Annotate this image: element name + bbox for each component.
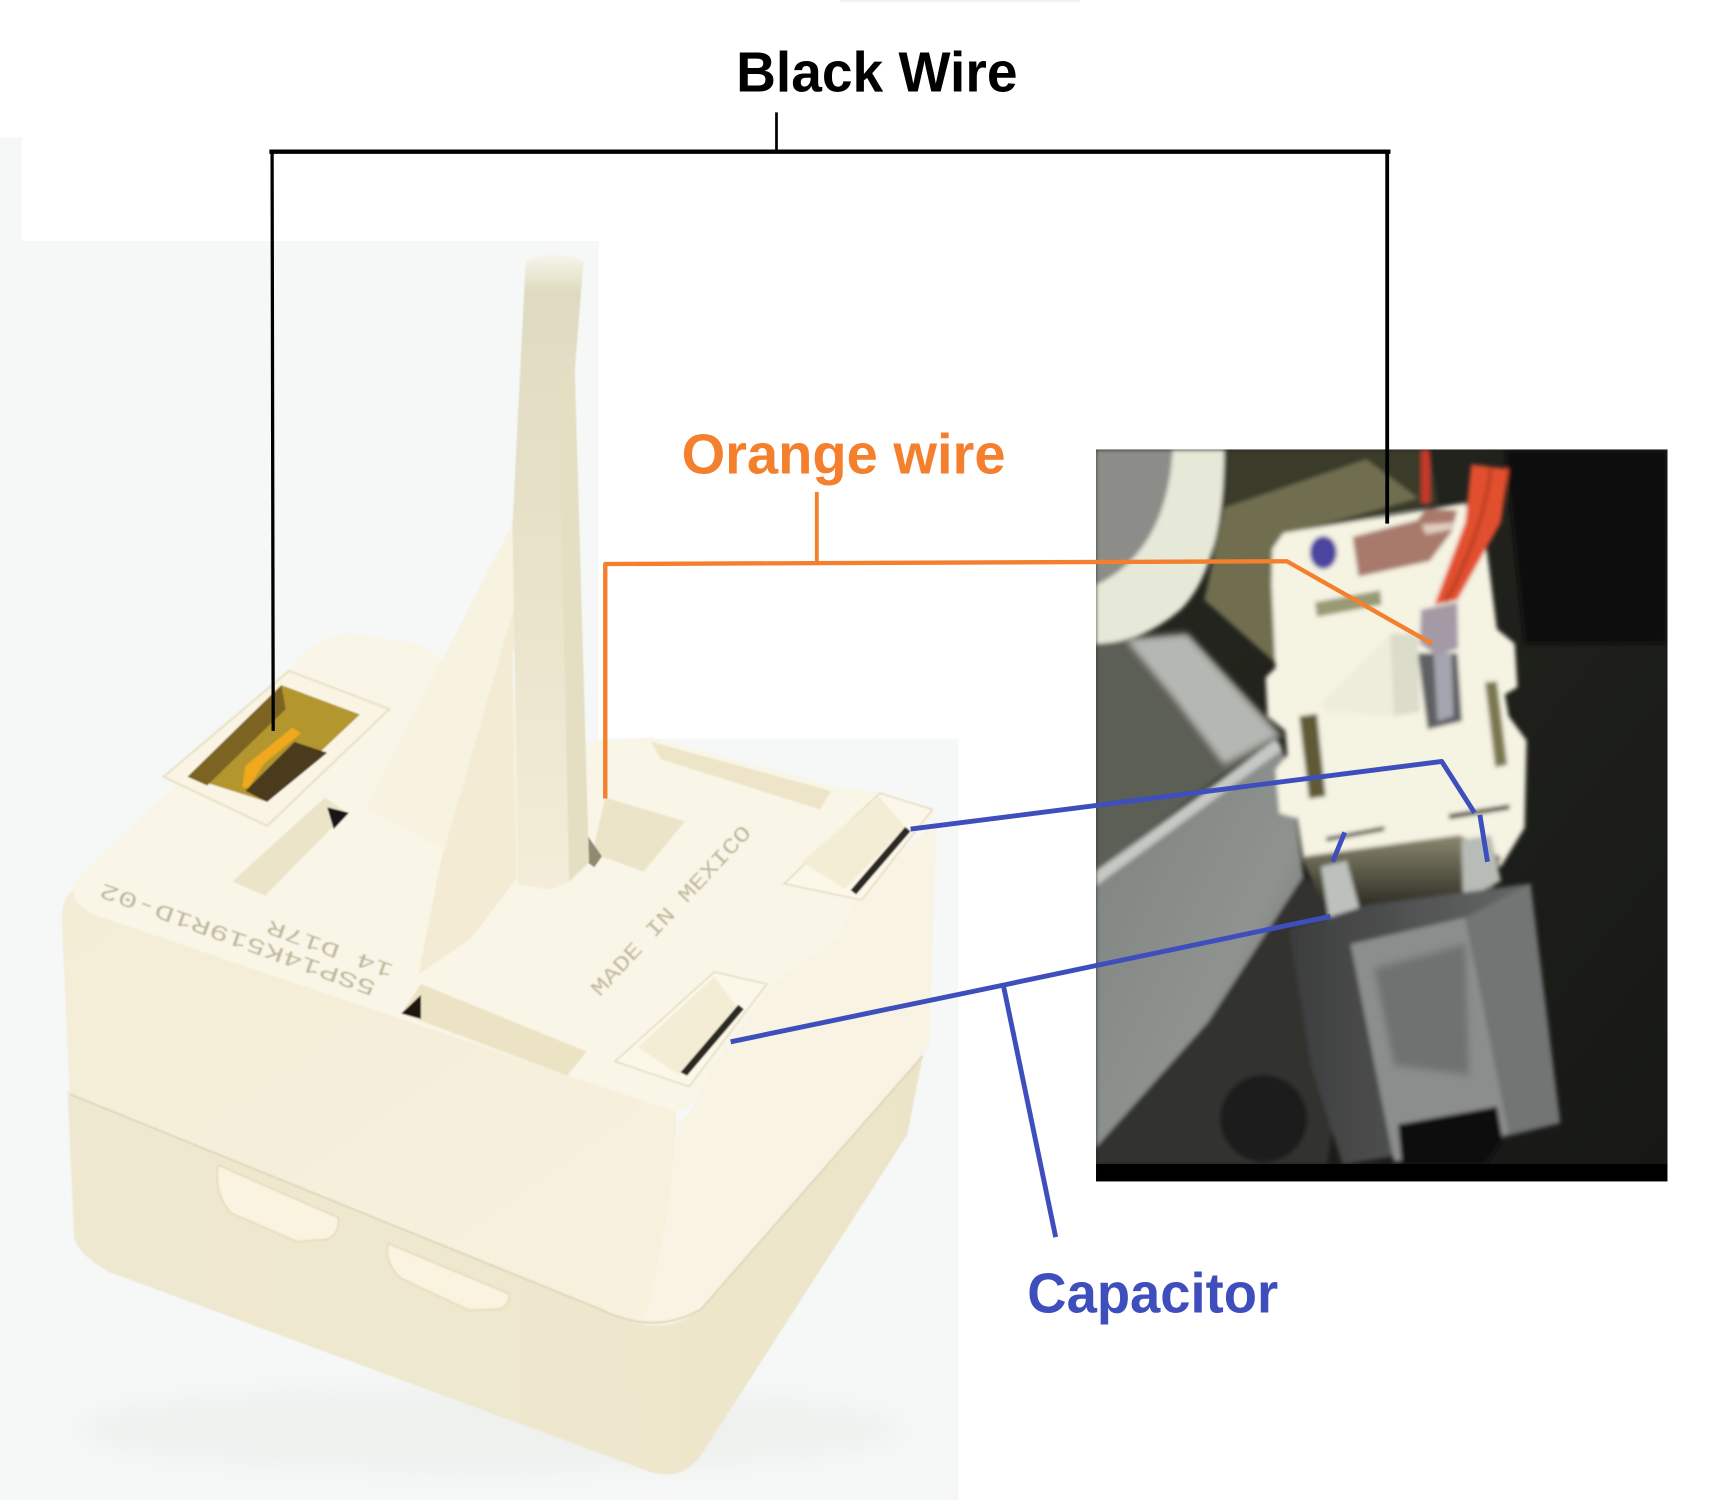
relay: product photo illustration	[62, 254, 937, 1474]
label: Capacitor: Capacitor	[1027, 1262, 1278, 1325]
relay upper left face	[62, 887, 676, 1324]
capacitor connector	[1398, 1107, 1503, 1165]
front fin	[419, 549, 531, 974]
pink connector	[1353, 508, 1457, 577]
spike	[513, 254, 589, 889]
grey spade terminal	[1418, 653, 1462, 729]
capacitor terminal bottom	[615, 972, 767, 1087]
fin	[1323, 634, 1420, 716]
moulded text: origin: MADE IN MEXICO	[587, 821, 757, 1002]
black wire lines	[269, 112, 1390, 731]
purple dot	[1310, 536, 1337, 569]
red wires	[1434, 464, 1509, 605]
capacitor terminal top	[784, 793, 932, 900]
label: Black Wire: Black Wire	[736, 42, 1017, 105]
top right darkness	[1505, 450, 1667, 644]
grey tray	[1096, 741, 1303, 1148]
clip tab left	[217, 1165, 338, 1241]
slits	[1326, 826, 1384, 841]
label: Orange wire: Orange wire	[682, 423, 1005, 486]
background clutter	[1212, 450, 1438, 554]
rectangular slot	[232, 797, 349, 896]
white relay body	[1266, 503, 1527, 867]
white tube	[1096, 450, 1224, 644]
moulded text: date code: 14 D17R	[264, 913, 397, 980]
relay top face	[74, 633, 937, 1111]
seam line	[70, 1056, 923, 1323]
front fin back	[365, 524, 531, 853]
installed relay photo	[1096, 449, 1667, 1181]
black wire terminal socket	[164, 671, 389, 826]
metal terminals	[1321, 861, 1362, 921]
relay underside	[1301, 835, 1501, 908]
relay lower body	[68, 1056, 923, 1474]
capacitor lines	[731, 761, 1488, 1237]
orange wire lines	[605, 492, 1432, 799]
back slot	[651, 742, 831, 809]
slots	[1315, 590, 1381, 617]
center hole	[587, 797, 685, 872]
moulded text: part number: 5SP14K519R1D-02	[97, 876, 380, 1000]
front slot	[401, 984, 587, 1076]
photo background: relay product shot	[0, 0, 1080, 1500]
capacitor	[1289, 884, 1560, 1165]
clip tab right	[387, 1244, 509, 1310]
relay upper right face	[643, 820, 937, 1326]
